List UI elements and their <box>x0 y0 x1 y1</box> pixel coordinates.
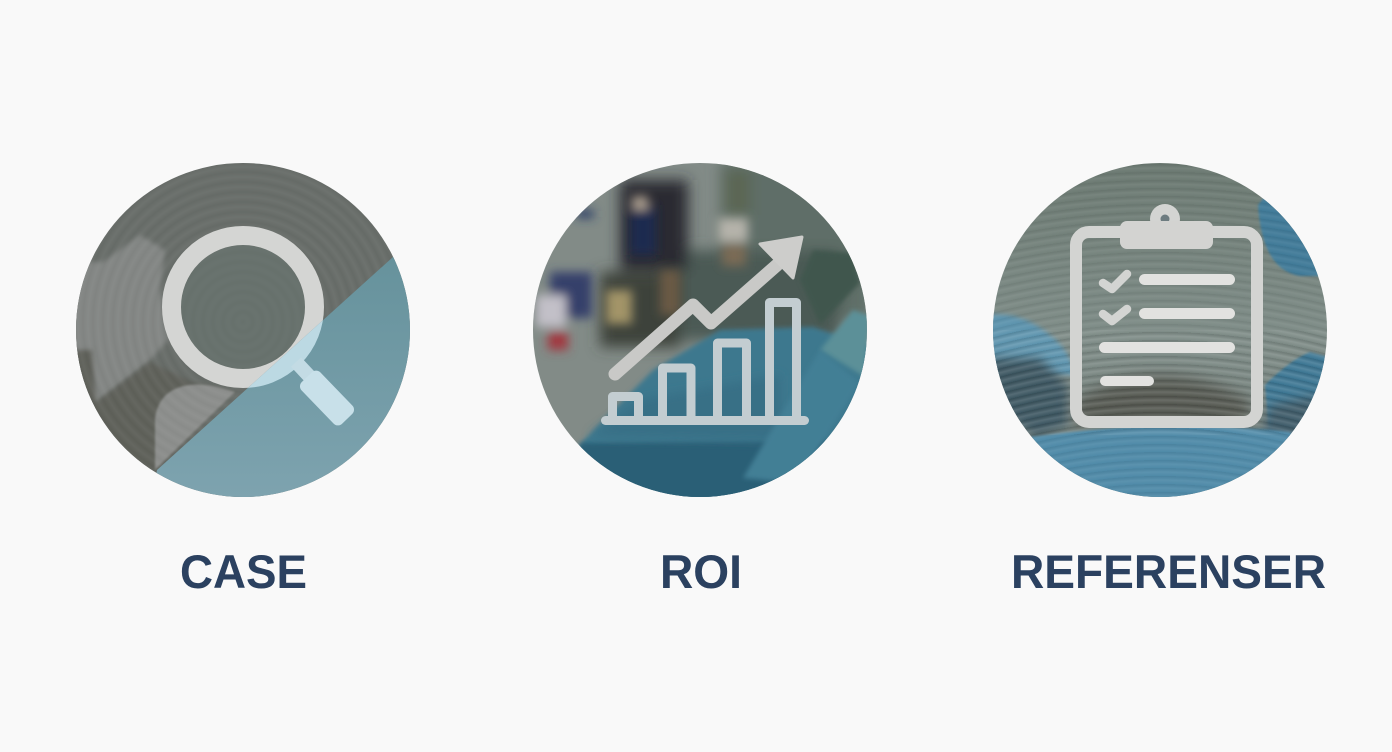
label: REFERENSER: REFERENSER <box>1011 545 1326 598</box>
circle photo background: case <box>70 160 420 510</box>
label: CASE: CASE <box>180 545 307 598</box>
checkmarks <box>1103 274 1127 289</box>
bars <box>612 302 796 420</box>
clip ring hole <box>1160 214 1170 224</box>
label: ROI: ROI <box>660 545 742 598</box>
infographic <box>76 163 1327 588</box>
icon: clipboard checklist <box>1076 204 1257 422</box>
arrow line <box>615 265 777 374</box>
icon: magnifying glass <box>172 236 356 428</box>
clipboard board <box>1076 232 1257 422</box>
second checkmark <box>1103 309 1127 321</box>
circle photo background: referenser <box>993 163 1327 497</box>
arrow head <box>760 237 802 278</box>
panel: referenser <box>993 163 1327 497</box>
panel: roi <box>533 163 867 497</box>
panel: case <box>70 160 420 510</box>
icon: growth chart with arrow <box>601 237 809 425</box>
circle photo background: roi <box>533 163 867 497</box>
clip bar <box>1120 221 1213 249</box>
baseline <box>601 416 809 425</box>
clip ring <box>1150 204 1180 234</box>
list lines <box>1099 274 1235 386</box>
